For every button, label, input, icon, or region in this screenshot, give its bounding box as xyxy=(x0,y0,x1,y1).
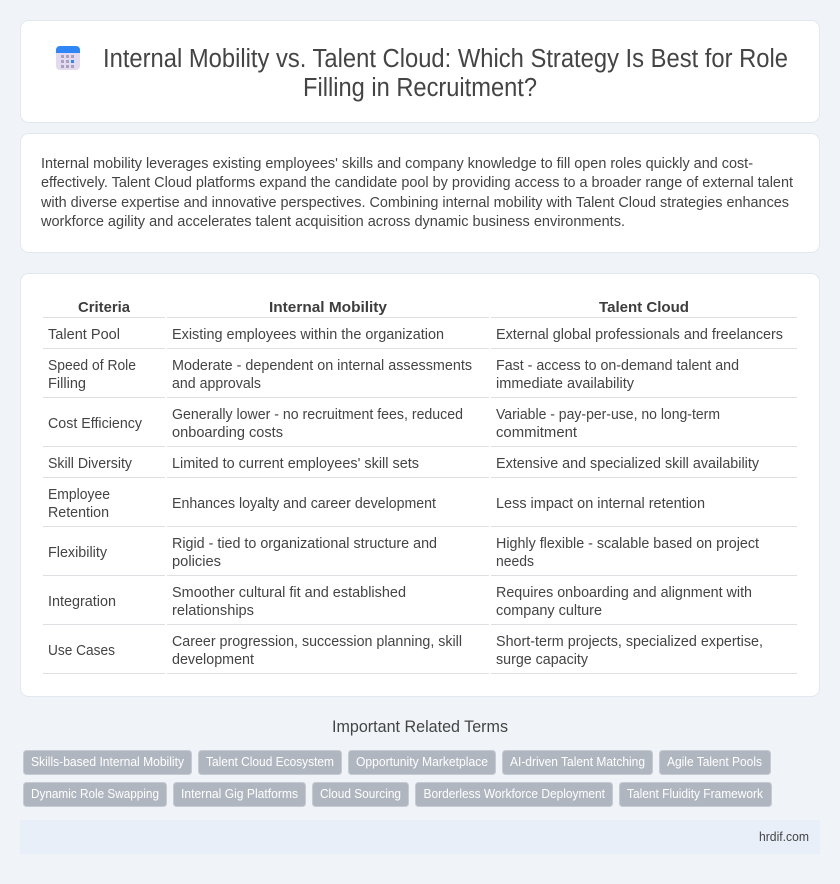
row: Cost Efficiency xyxy=(43,407,797,447)
related term tags: Opportunity Marketplace xyxy=(356,755,488,769)
table header row: Criteria xyxy=(78,299,131,316)
row: Integration: company culture xyxy=(496,603,602,619)
row: Speed of Role Filling xyxy=(43,358,797,398)
table header row xyxy=(43,299,797,318)
row: Use Cases: development xyxy=(172,652,254,668)
row: Skill Diversity: Limited to current employees' skill sets xyxy=(172,456,419,472)
row: Flexibility xyxy=(43,536,797,576)
panel: comparison table xyxy=(20,274,820,696)
table header row: Internal Mobility xyxy=(269,299,388,316)
title: Filling in Recruitment? xyxy=(303,74,537,102)
row: Talent Pool: External global professionals and freelancers xyxy=(496,327,783,343)
intro text: with diverse expertise and innovative perspectives. Combining internal mobility with Talent Cloud strategies enhances xyxy=(40,195,789,211)
row: Speed of Role Filling: Moderate - dependent on internal assessments xyxy=(172,358,472,374)
row: Talent Pool xyxy=(43,327,797,349)
row: Use Cases: Use Cases xyxy=(48,643,115,659)
row: Talent Pool: Existing employees within the organization xyxy=(172,327,444,343)
row: Flexibility: Flexibility xyxy=(48,545,108,561)
row: Employee Retention xyxy=(43,487,797,527)
row: Cost Efficiency: onboarding costs xyxy=(172,425,283,441)
title: Internal Mobility vs. Talent Cloud: Which Strategy Is Best for Role xyxy=(103,45,788,73)
table header row: Talent Cloud xyxy=(599,299,689,316)
row: Cost Efficiency: commitment xyxy=(496,425,577,441)
row: Skill Diversity xyxy=(43,456,797,478)
related term tags: Dynamic Role Swapping xyxy=(31,787,159,801)
row: Integration: relationships xyxy=(172,603,254,619)
row: Use Cases xyxy=(43,634,797,674)
intro text xyxy=(40,156,793,230)
row: Flexibility: policies xyxy=(172,554,221,570)
row: Skill Diversity: Skill Diversity xyxy=(48,456,133,472)
row: Speed of Role Filling: Filling xyxy=(48,376,86,392)
row: Employee Retention: Employee xyxy=(48,487,110,503)
row: Integration: Integration xyxy=(48,594,116,610)
row: Use Cases: Career progression, succession planning, skill xyxy=(172,634,462,650)
intro text: Internal mobility leverages existing employees' skills and company knowledge to fill open roles quickly and cost- xyxy=(41,156,753,172)
heading: related terms: Important Related Terms xyxy=(332,718,508,736)
row: Integration: Requires onboarding and alignment with xyxy=(496,585,752,601)
icon: calendar xyxy=(56,46,80,70)
panel: intro paragraph xyxy=(20,134,820,252)
related term tags: AI-driven Talent Matching xyxy=(510,755,645,769)
panel: title card xyxy=(20,20,820,122)
row: Speed of Role Filling: Fast - access to on-demand talent and xyxy=(496,358,739,374)
intro text: effectively. Talent Cloud platforms expand the candidate pool by providing access to a broader range of external talent xyxy=(41,175,793,191)
intro text: workforce agility and accelerates talent acquisition across dynamic business environments. xyxy=(40,214,625,230)
row: Speed of Role Filling: and approvals xyxy=(172,376,261,392)
row: Skill Diversity: Extensive and specialized skill availability xyxy=(496,456,760,472)
related term tags: Talent Fluidity Framework xyxy=(627,787,764,801)
row: Employee Retention: Enhances loyalty and career development xyxy=(172,496,436,512)
row: Integration: Smoother cultural fit and established xyxy=(172,585,406,601)
related term tags: Skills-based Internal Mobility xyxy=(31,755,185,769)
row: Speed of Role Filling: Speed of Role xyxy=(48,358,136,374)
related term tags: Internal Gig Platforms xyxy=(181,787,298,801)
row: Flexibility: Rigid - tied to organizational structure and xyxy=(172,536,437,552)
related term tags xyxy=(24,750,772,806)
related term tags: Cloud Sourcing xyxy=(320,787,401,801)
row: Employee Retention: Retention xyxy=(48,505,109,521)
row: Employee Retention: Less impact on internal retention xyxy=(496,496,705,512)
row: Use Cases: Short-term projects, specialized expertise, xyxy=(496,634,763,650)
footer bar: hrdif.com xyxy=(759,830,809,844)
related term tags: Agile Talent Pools xyxy=(667,755,762,769)
related term tags: Talent Cloud Ecosystem xyxy=(206,755,334,769)
row: Flexibility: Highly flexible - scalable based on project xyxy=(496,536,759,552)
related term tags: Borderless Workforce Deployment xyxy=(424,787,605,801)
row: Use Cases: surge capacity xyxy=(496,652,589,668)
row: Cost Efficiency: Generally lower - no recruitment fees, reduced xyxy=(172,407,463,423)
footer bar xyxy=(20,820,820,854)
title xyxy=(103,45,788,102)
row: Speed of Role Filling: immediate availability xyxy=(496,376,635,392)
row: Cost Efficiency: Cost Efficiency xyxy=(48,416,143,432)
row: Talent Pool: Talent Pool xyxy=(48,327,120,343)
row: Integration xyxy=(43,585,797,625)
row: Cost Efficiency: Variable - pay-per-use, no long-term xyxy=(496,407,720,423)
row: Flexibility: needs xyxy=(496,554,534,570)
